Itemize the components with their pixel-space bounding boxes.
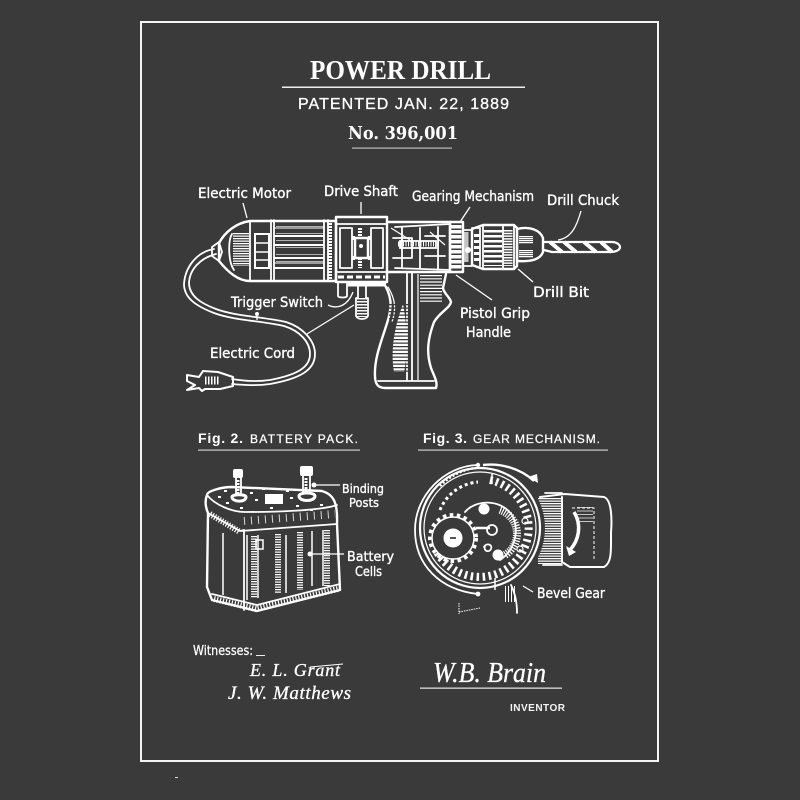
handle stub [459,585,517,614]
label: Gearing Mechanism: Gearing Mechanism [412,189,534,205]
pistol grip handle [375,272,451,388]
witnesses signatures [193,644,351,704]
gearbox and drive shaft [336,217,387,282]
heading: Fig. 3: Fig. 3. [423,430,467,446]
label: Electric Motor [198,186,291,218]
binding post left [232,469,246,501]
label: Pistol Grip Handle: Pistol Grip [460,306,530,322]
rotation arrow [483,465,538,483]
patent date: PATENTED JAN. 22, 1889 [298,96,509,113]
main figure: power drill [184,217,620,391]
signature: W.B. Brain: W.B. Brain [433,658,546,689]
binding post right [299,466,315,500]
label: Battery Cells: Battery [347,550,394,565]
drill chuck [472,225,543,269]
label: Binding Posts: Posts [349,495,379,510]
trigger [338,283,386,319]
inventor signature block [420,658,566,714]
label: Pistol Grip Handle: Handle [466,325,511,341]
power cord and plug [184,242,315,391]
label: Trigger Switch: Trigger Switch [230,295,323,311]
figure 2: battery pack [198,430,394,611]
title block [282,55,525,149]
heading: Fig. 2: Fig. 2. [198,430,243,446]
heading: Fig. 2: BATTERY PACK. [250,432,358,446]
figure 3: gear mechanism [415,430,611,614]
signature: J. W. Matthews: J. W. Matthews [228,683,351,704]
label: Electric Motor: Electric Motor [198,186,291,202]
label: Electric Cord: Electric Cord [210,346,295,362]
motor housing [219,220,336,281]
housing [540,493,611,567]
label: Binding Posts: Binding [342,481,384,496]
label: Binding Posts [312,481,384,510]
label: Drive Shaft: Drive Shaft [324,184,398,200]
label: Pistol Grip Handle [456,275,530,341]
inventor caption: INVENTOR [510,703,566,714]
label: Drill Chuck: Drill Chuck [547,193,620,209]
gearing mechanism housing [387,222,480,272]
label: Battery Cells: Cells [355,565,382,580]
heading: Fig. 2 [198,430,360,451]
label: Trigger Switch [230,292,354,334]
witnesses label: Witnesses: [193,644,253,659]
signature: E. L. Grant: E. L. Grant [249,660,341,680]
heading: Fig. 3 [418,430,608,451]
battery cell marker [256,540,263,549]
label: Battery Cells [308,550,394,580]
main ring gear [415,463,545,596]
gear illustration [415,463,611,614]
label: Drill Bit [518,269,590,301]
labels for main figure [198,184,620,362]
heading: Fig. 3: GEAR MECHANISM. [473,432,600,446]
label: Drill Bit: Drill Bit [533,285,590,301]
title: POWER DRILL [310,55,491,85]
label: Bevel Gear: Bevel Gear [537,586,605,602]
small pinion gear [430,515,476,561]
label: Drive Shaft [324,184,398,214]
battery illustration [206,466,340,611]
label: Drill Chuck [547,193,620,240]
inner works [465,503,528,560]
label: Gearing Mechanism [412,189,534,222]
drill bit [544,242,620,252]
patent number: No. 396,001 [348,123,458,144]
